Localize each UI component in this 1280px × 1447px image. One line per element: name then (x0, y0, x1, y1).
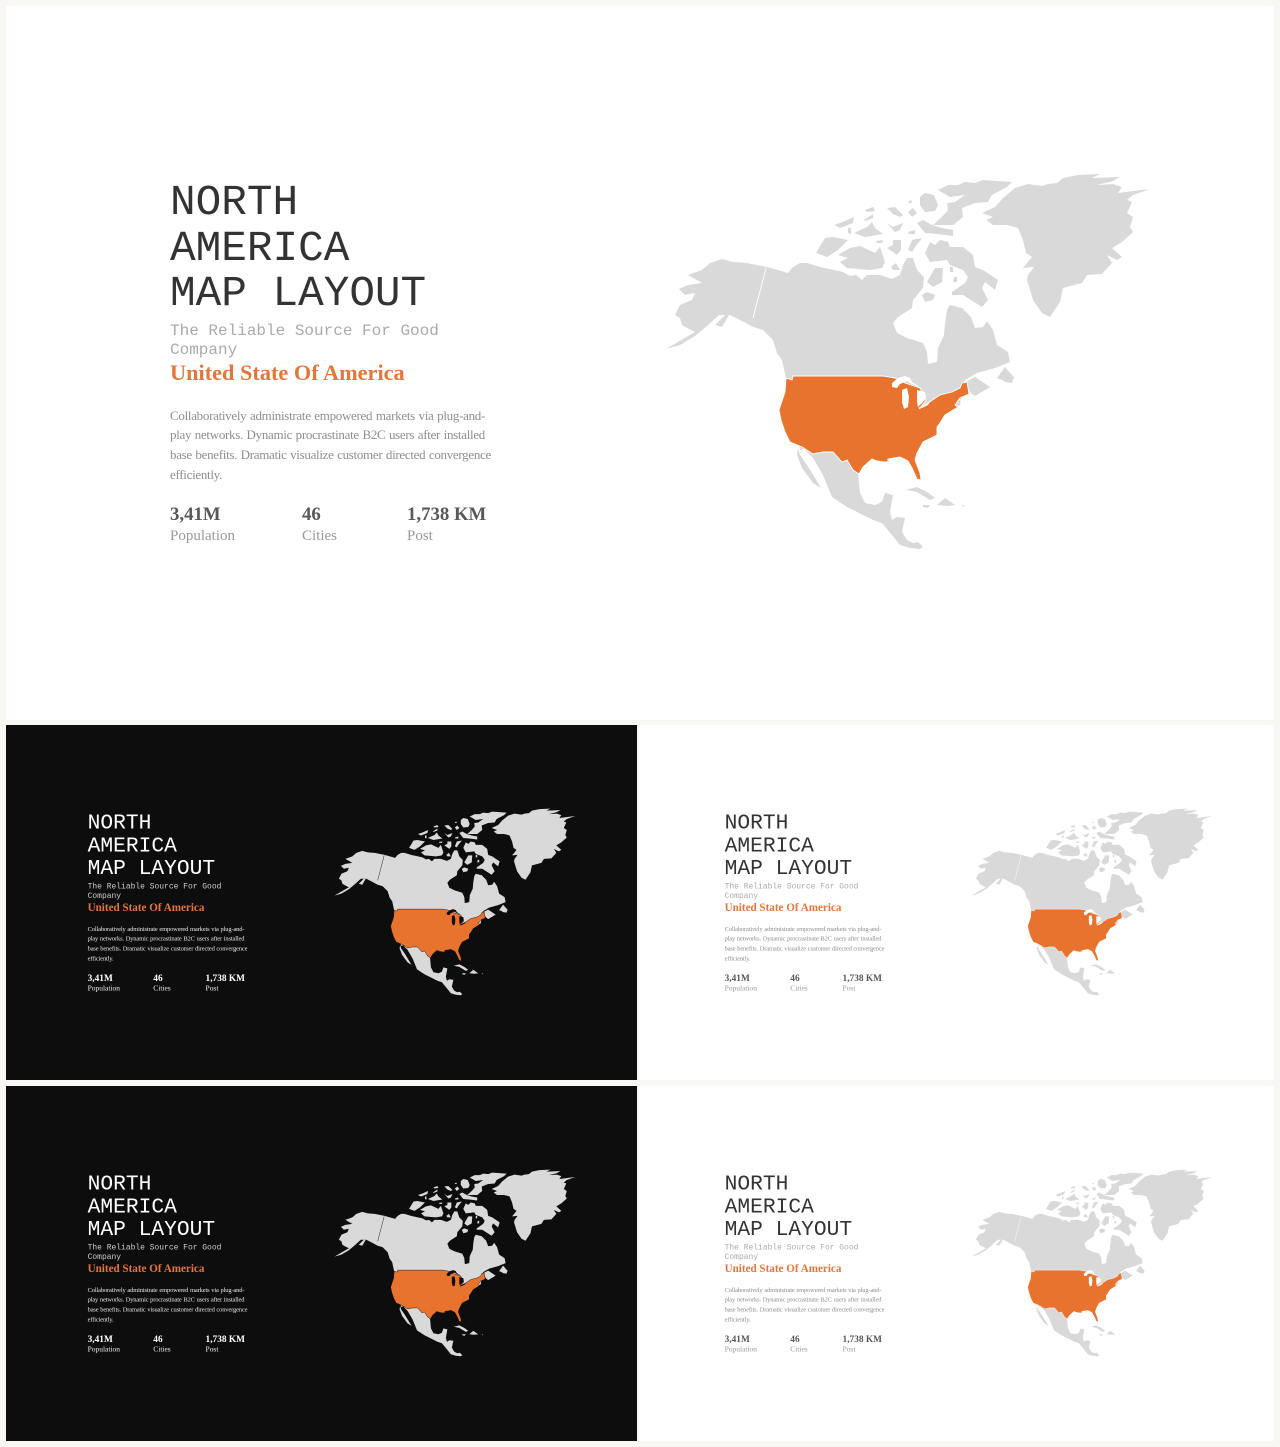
stat: post value: 1,738 KM (407, 504, 486, 525)
stat: cities value: 46 (790, 1334, 799, 1344)
title (88, 811, 215, 880)
heading: United State Of America: United State Of America (88, 1262, 204, 1275)
title: MAP LAYOUT (88, 1217, 215, 1241)
body text: play networks. Dynamic procrastinate B2C users after installed (88, 1296, 244, 1303)
subtitle: The Reliable Source For Good (88, 1243, 221, 1252)
stat: population value: 3,41M (170, 504, 221, 525)
body text (724, 1286, 884, 1323)
heading: United State Of America: United State Of America (724, 1262, 841, 1275)
map: North America with USA highlighted (334, 808, 575, 996)
panel: dark slide, row 2 (6, 725, 637, 1080)
body text: efficiently. (170, 467, 222, 482)
title: MAP LAYOUT (724, 856, 852, 880)
subtitle (88, 882, 221, 901)
body text: efficiently. (724, 954, 750, 962)
title: AMERICA (170, 224, 349, 273)
stat: cities value: 46 (790, 973, 799, 983)
body text: play networks. Dynamic procrastinate B2C users after installed (724, 935, 881, 942)
stat: post value: 1,738 KM (842, 1334, 881, 1344)
stat: post label: Post (842, 1346, 855, 1354)
subtitle (724, 882, 858, 901)
subtitle: Company (88, 892, 121, 901)
body text: play networks. Dynamic procrastinate B2C users after installed (170, 427, 485, 442)
map: North America with USA highlighted (666, 174, 1150, 549)
heading: United State Of America: United State Of America (724, 901, 841, 914)
title: AMERICA (724, 1194, 813, 1219)
title: NORTH (170, 178, 298, 227)
stat: population label: Population (170, 528, 235, 544)
title (88, 1172, 215, 1241)
title (724, 1172, 852, 1241)
title: AMERICA (88, 833, 177, 858)
body text: Collaboratively administrate empowered markets via plug-and- (170, 408, 485, 422)
stat: post label: Post (206, 1346, 218, 1354)
body text: play networks. Dynamic procrastinate B2C users after installed (88, 935, 244, 942)
title: MAP LAYOUT (724, 1217, 852, 1241)
subtitle (88, 1243, 221, 1262)
subtitle: The Reliable Source For Good (724, 882, 858, 891)
body text: base benefits. Dramatic visualize customer directed convergence (88, 944, 247, 952)
stat: post label: Post (206, 985, 218, 993)
title: MAP LAYOUT (88, 856, 215, 880)
subtitle: Company (724, 892, 758, 901)
stat: cities value: 46 (302, 504, 321, 525)
body text: base benefits. Dramatic visualize customer directed convergence (170, 447, 491, 462)
body text: base benefits. Dramatic visualize customer directed convergence (88, 1305, 247, 1313)
stat: cities label: Cities (790, 1346, 807, 1354)
panel: dark slide, row 3 (6, 1086, 637, 1441)
stat: population label: Population (724, 985, 756, 993)
stat: post value: 1,738 KM (206, 1334, 245, 1344)
title: NORTH (724, 1172, 788, 1196)
subtitle: Company (170, 341, 237, 359)
panel: large light slide (6, 6, 1274, 720)
subtitle: The Reliable Source For Good (170, 322, 439, 340)
stat: cities value: 46 (153, 1334, 163, 1344)
stat: population value: 3,41M (88, 973, 113, 983)
map: North America with USA highlighted (334, 1170, 575, 1356)
body text: Collaboratively administrate empowered markets via plug-and- (88, 925, 244, 932)
body text: base benefits. Dramatic visualize customer directed convergence (724, 944, 884, 952)
title (170, 178, 426, 318)
subtitle: Company (88, 1253, 121, 1262)
stat: population label: Population (88, 1346, 120, 1354)
body text: Collaboratively administrate empowered markets via plug-and- (724, 925, 881, 932)
heading: United State Of America: United State Of America (88, 901, 204, 914)
body text: efficiently. (724, 1315, 750, 1323)
heading: United State Of America: United State Of America (170, 360, 405, 385)
body text (724, 925, 884, 962)
stat: cities label: Cities (153, 1346, 171, 1354)
title: NORTH (88, 1172, 151, 1196)
subtitle: The Reliable Source For Good (724, 1243, 858, 1252)
body text: efficiently. (88, 954, 113, 962)
title: NORTH (88, 811, 151, 835)
panel: light slide, row 3 (639, 1086, 1274, 1441)
subtitle: The Reliable Source For Good (88, 882, 221, 891)
body text: Collaboratively administrate empowered markets via plug-and- (724, 1286, 881, 1293)
body text (170, 408, 491, 482)
panel: light slide, row 2 (639, 725, 1274, 1080)
body text (88, 925, 248, 962)
title: AMERICA (724, 833, 813, 858)
map: North America with USA highlighted (972, 808, 1212, 996)
title: NORTH (724, 811, 788, 835)
stat: population value: 3,41M (724, 973, 749, 983)
stat: post value: 1,738 KM (206, 973, 245, 983)
body text: play networks. Dynamic procrastinate B2C users after installed (724, 1296, 881, 1303)
title: AMERICA (88, 1194, 177, 1219)
stat: population value: 3,41M (724, 1334, 749, 1344)
stat: population label: Population (724, 1346, 756, 1354)
stat: cities label: Cities (302, 528, 337, 544)
body text: efficiently. (88, 1315, 113, 1323)
stat: cities label: Cities (790, 985, 807, 993)
subtitle: Company (724, 1253, 758, 1262)
stat: population label: Population (88, 985, 120, 993)
body text: base benefits. Dramatic visualize customer directed convergence (724, 1305, 884, 1313)
stat: post value: 1,738 KM (842, 973, 881, 983)
stat: cities value: 46 (153, 973, 163, 983)
body text (88, 1286, 248, 1323)
stat: post label: Post (842, 985, 855, 993)
title (724, 811, 852, 880)
subtitle (170, 322, 439, 359)
stat: cities label: Cities (153, 985, 171, 993)
stat: population value: 3,41M (88, 1334, 113, 1344)
subtitle (724, 1243, 858, 1262)
title: MAP LAYOUT (170, 269, 426, 318)
stat: post label: Post (407, 528, 433, 544)
body text: Collaboratively administrate empowered markets via plug-and- (88, 1286, 244, 1293)
map: North America with USA highlighted (972, 1170, 1212, 1356)
